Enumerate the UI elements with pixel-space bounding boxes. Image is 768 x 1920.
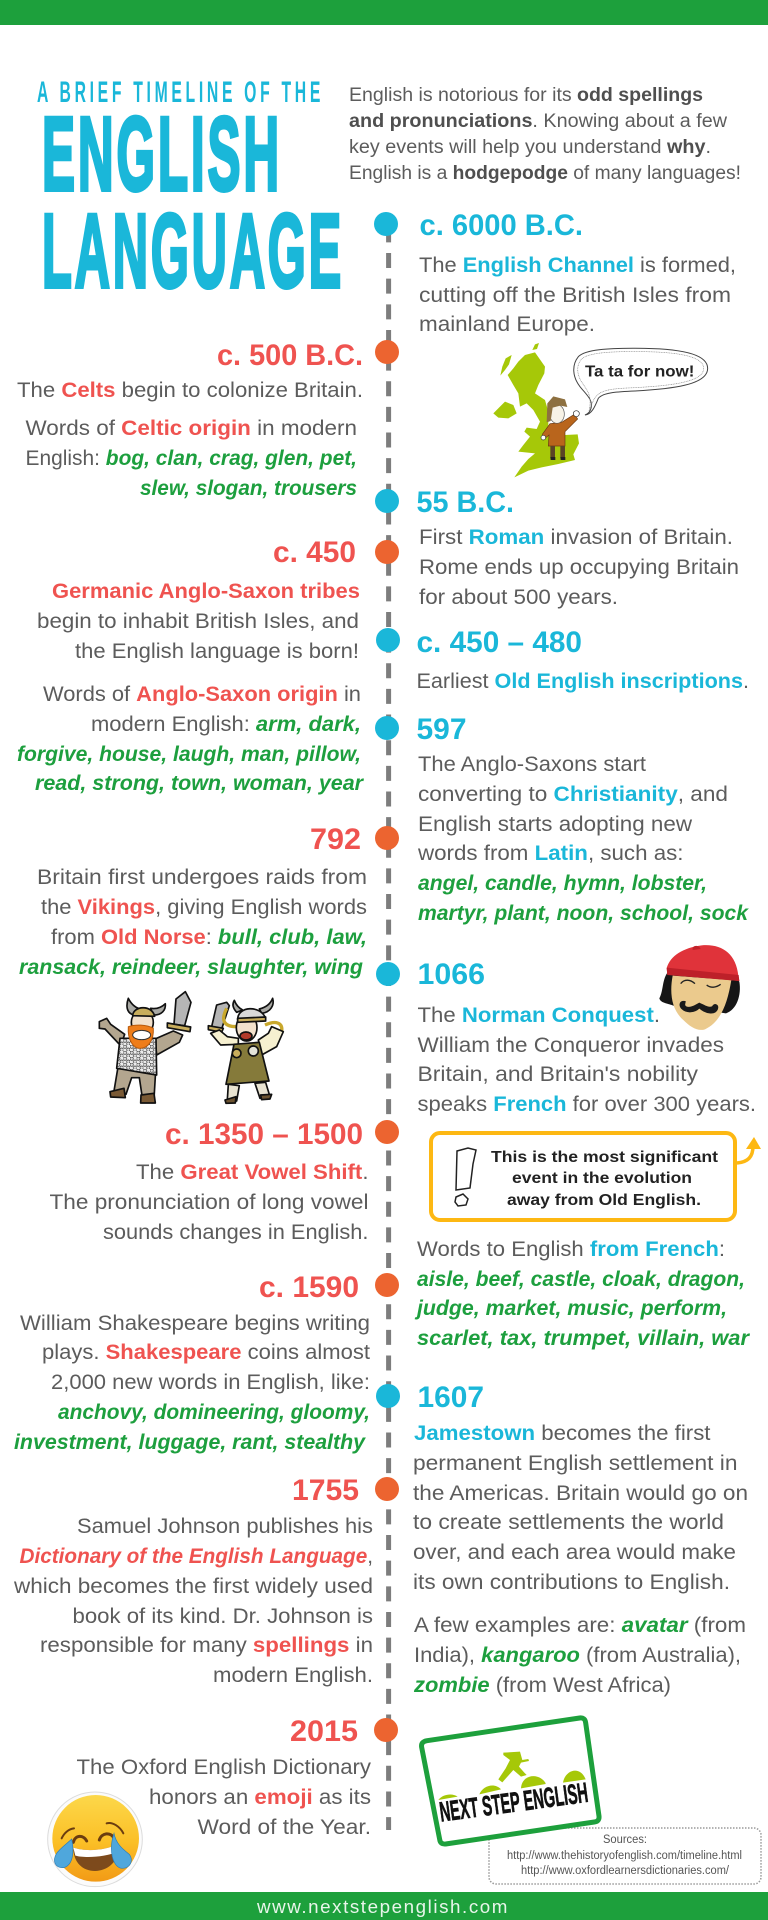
- heading: 1607: [418, 1381, 484, 1414]
- body text: [17, 579, 365, 795]
- body text: [13, 1514, 373, 1687]
- callout text: [491, 1149, 718, 1209]
- body text: for about 500 years.: [419, 585, 618, 609]
- body text: The Great Vowel Shift .: [136, 1160, 368, 1184]
- body text: India), kangaroo (from Australia),: [414, 1643, 741, 1667]
- body text: [50, 1160, 369, 1244]
- panel: c. 450 – 480: [416, 626, 749, 693]
- heading: c. 1350 – 1500: [165, 1118, 363, 1151]
- callout box: [431, 1133, 735, 1220]
- face: [671, 976, 731, 1030]
- body text: the Americas. Britain would go on: [413, 1481, 748, 1505]
- body text: Britain first undergoes raids from: [37, 865, 367, 889]
- body text: sounds changes in English.: [103, 1220, 368, 1244]
- body text: honors an emoji as its: [149, 1785, 371, 1809]
- body text: book of its kind. Dr. Johnson is: [72, 1604, 373, 1628]
- panel: 1607: [413, 1381, 748, 1697]
- body text: Dictionary of the English Language,: [20, 1544, 373, 1568]
- body text: William Shakespeare begins writing: [20, 1311, 370, 1335]
- panel: 1755: [13, 1474, 373, 1687]
- sources text: http://www.thehistoryofenglish.com/timeline.html: [507, 1850, 742, 1862]
- sources text: [507, 1834, 742, 1877]
- body text: the English language is born!: [75, 639, 359, 663]
- panel: c. 1590: [14, 1271, 370, 1454]
- dot: c. 1350-1500: [375, 1120, 399, 1144]
- body text: Germanic Anglo-Saxon tribes: [52, 579, 360, 603]
- logo runner: [498, 1752, 529, 1782]
- logo: Next Step English: [422, 1718, 599, 1844]
- heading: c. 6000 B.C.: [420, 209, 583, 242]
- viking man: [99, 992, 191, 1103]
- body text: Rome ends up occupying Britain: [419, 555, 739, 579]
- body text: modern English: arm, dark,: [91, 712, 361, 736]
- body text: The Celts begin to colonize Britain.: [17, 378, 363, 402]
- title: A BRIEF TIMELINE OF THE: [37, 76, 324, 109]
- logo frame: [422, 1718, 599, 1844]
- heading: 2015: [290, 1715, 358, 1748]
- heading: c. 450 – 480: [416, 626, 582, 659]
- map of Britain: [493, 343, 579, 477]
- body text: investment, luggage, rant, stealthy: [14, 1430, 366, 1454]
- body text: from Old Norse: bull, club, law,: [51, 925, 367, 949]
- heading: 1066: [418, 958, 485, 991]
- body text: permanent English settlement in: [413, 1451, 738, 1475]
- heading: c. 450: [273, 536, 356, 569]
- body text: its own contributions to English.: [413, 1570, 730, 1594]
- dot: 792: [375, 826, 399, 850]
- callout arrow: [737, 1146, 753, 1163]
- dot: c. 1590: [375, 1273, 399, 1297]
- panel: 1066: [418, 958, 756, 1116]
- panel: c. 450: [17, 536, 365, 795]
- body text: Word of the Year.: [198, 1815, 371, 1839]
- heading: 792: [310, 823, 361, 856]
- body text: forgive, house, laugh, man, pillow,: [17, 742, 361, 766]
- sources text: http://www.oxfordlearnersdictionaries.com/: [521, 1865, 730, 1877]
- callout: most significant event: [431, 1133, 761, 1220]
- body text: 2,000 new words in English, like:: [51, 1370, 370, 1394]
- icon: face with tears of joy emoji: [48, 1792, 142, 1887]
- body text: [413, 1421, 748, 1697]
- text block: words from French: judge, market, music, perform,: [414, 1296, 727, 1320]
- body text: [17, 378, 363, 500]
- text block: words from French: [414, 1237, 751, 1350]
- moustache: [680, 1002, 718, 1013]
- panel: 597: [416, 713, 749, 925]
- eyes: [681, 980, 721, 987]
- body text: begin to inhabit British Isles, and: [37, 609, 359, 633]
- logo text: NEXT STEP ENGLISH: [438, 1777, 590, 1828]
- dot: 55 B.C.: [375, 489, 399, 513]
- body text: English: bog, clan, crag, glen, pet,: [26, 446, 357, 470]
- body text: to create settlements the world: [413, 1510, 724, 1534]
- intro text: key events will help you understand why.: [349, 137, 711, 158]
- body text: William the Conqueror invades: [418, 1033, 724, 1057]
- dot: c. 500 B.C.: [375, 340, 399, 364]
- dot: 1755: [375, 1477, 399, 1501]
- body text: Britain, and Britain's nobility: [418, 1062, 698, 1086]
- callout text: This is the most significant: [491, 1149, 718, 1166]
- intro text: English is a hodgepodge of many languages!: [349, 163, 741, 184]
- body text: speaks French for over 300 years.: [418, 1092, 756, 1116]
- body text: Samuel Johnson publishes his: [77, 1514, 373, 1538]
- panel: c. 500 B.C.: [17, 339, 363, 500]
- body text: [76, 1755, 371, 1839]
- body text: The Oxford English Dictionary: [76, 1755, 371, 1779]
- dot: c. 450: [375, 540, 399, 564]
- body text: converting to Christianity , and: [418, 782, 728, 806]
- speech bubble: [574, 348, 708, 415]
- panel: c. 1350 – 1500: [50, 1118, 369, 1244]
- body text: mainland Europe.: [419, 312, 595, 336]
- footer bar with website: [0, 1892, 768, 1920]
- footer bar with website: www.nextstepenglish.com: [256, 1897, 509, 1917]
- character: [541, 396, 579, 460]
- body text: words from Latin, such as:: [417, 841, 684, 865]
- body text: The pronunciation of long vowel: [50, 1190, 369, 1214]
- viking woman: [208, 998, 283, 1103]
- body text: [19, 865, 367, 979]
- text block: words from French: Words to English from French:: [417, 1237, 725, 1261]
- body text: angel, candle, hymn, lobster,: [418, 871, 707, 895]
- panel: c. 6000 B.C.: [419, 209, 736, 336]
- illustration: two vikings: [99, 992, 283, 1103]
- body text: The English Channel is formed,: [419, 253, 736, 277]
- body text: modern English.: [213, 1663, 373, 1687]
- intro text: English is notorious for its odd spellings: [349, 85, 703, 106]
- body text: A few examples are: avatar (from: [414, 1613, 746, 1637]
- icon: exclamation mark: [455, 1148, 476, 1206]
- body text: [419, 253, 736, 336]
- callout text: event in the evolution: [512, 1170, 692, 1187]
- body text: cutting off the British Isles from: [419, 283, 731, 307]
- body text: The Norman Conquest .: [418, 1003, 660, 1027]
- text block: words from French: scarlet, tax, trumpet, villain, war: [417, 1326, 751, 1350]
- text block: words from French: aisle, beef, castle, cloak, dragon,: [417, 1267, 745, 1291]
- top green bar: [0, 0, 768, 25]
- heading: c. 1590: [259, 1271, 359, 1304]
- body text: [418, 1003, 756, 1116]
- body text: Words of Celtic origin in modern: [26, 416, 357, 440]
- dot: c. 450-480: [376, 628, 400, 652]
- body text: English starts adopting new: [418, 812, 692, 836]
- dot: 1066: [376, 962, 400, 986]
- body text: over, and each area would make: [413, 1540, 736, 1564]
- heading: 597: [416, 713, 466, 746]
- body text: martyr, plant, noon, school, sock: [418, 901, 749, 925]
- title: ENGLISH: [42, 96, 282, 213]
- body text: zombie (from West Africa): [413, 1673, 671, 1697]
- body text: Words of Anglo-Saxon origin in: [43, 682, 361, 706]
- dot: 2015: [374, 1718, 398, 1742]
- body text: Jamestown becomes the first: [414, 1421, 711, 1445]
- body text: slew, slogan, trousers: [140, 476, 357, 500]
- panel: 55 B.C.: [416, 486, 739, 609]
- callout text: away from Old English.: [507, 1192, 701, 1209]
- panel: 2015: [76, 1715, 371, 1839]
- sources box: [489, 1828, 761, 1884]
- heading: 1755: [292, 1474, 359, 1507]
- beret: [667, 945, 739, 981]
- illustration: Norman man with red beret: [659, 945, 740, 1030]
- dot: c. 6000 B.C.: [374, 212, 398, 236]
- body text: plays. Shakespeare coins almost: [42, 1340, 370, 1364]
- body text: [14, 1311, 370, 1454]
- body text: which becomes the first widely used: [13, 1574, 373, 1598]
- body text: anchovy, domineering, gloomy,: [58, 1400, 370, 1424]
- body text: ransack, reindeer, slaughter, wing: [19, 955, 363, 979]
- title: [37, 76, 344, 310]
- dot: 597: [375, 716, 399, 740]
- timeline axis with dots: [374, 212, 400, 1830]
- illustration: UK map with character and speech bubble: [493, 343, 708, 477]
- heading: c. 500 B.C.: [217, 339, 363, 372]
- hair: [659, 970, 740, 1013]
- body text: Earliest Old English inscriptions.: [416, 669, 749, 693]
- panel: 792: [19, 823, 367, 979]
- speech text: Ta ta for now!: [585, 364, 694, 381]
- heading: 55 B.C.: [416, 486, 514, 519]
- body text: [419, 525, 739, 609]
- body text: the Vikings, giving English words: [41, 895, 367, 919]
- text: LANGUAGE: [42, 193, 344, 310]
- dot: 1607: [376, 1384, 400, 1408]
- body text: [417, 752, 749, 925]
- body text: First Roman invasion of Britain.: [419, 525, 733, 549]
- intro text: [349, 85, 741, 184]
- sources text: Sources:: [603, 1834, 647, 1846]
- body text: read, strong, town, woman, year: [35, 771, 365, 795]
- intro text: and pronunciations . Knowing about a few: [349, 111, 727, 132]
- logo mounds: [438, 1771, 586, 1800]
- body text: The Anglo-Saxons start: [418, 752, 646, 776]
- body text: responsible for many spellings in: [40, 1633, 373, 1657]
